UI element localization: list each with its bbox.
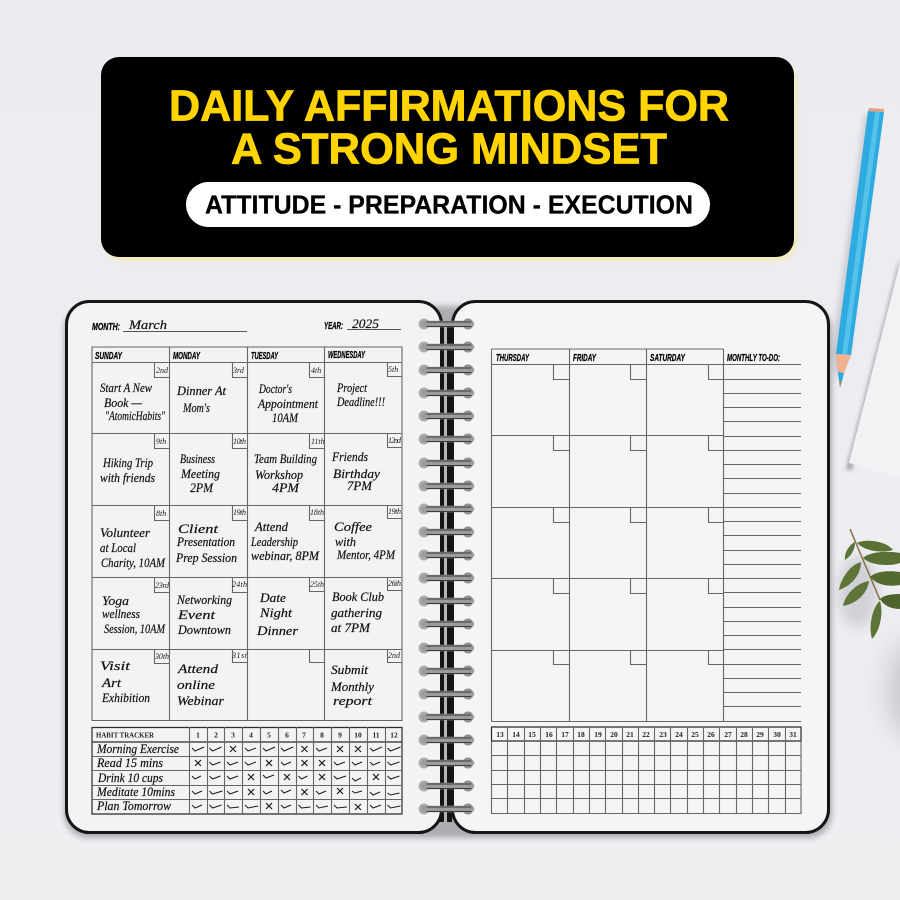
date numbers: 23rd (155, 581, 170, 590)
day numbers: 24 (675, 730, 683, 739)
date numbers: 30th (154, 652, 169, 661)
handwritten note: networking: Event (177, 608, 216, 622)
handwritten note: new book: Book — (104, 396, 143, 410)
month field: March (128, 318, 167, 332)
day numbers: 31 (789, 730, 797, 739)
handwritten note: doctor (257, 382, 318, 425)
handwritten note: art exhibition (100, 659, 150, 705)
habit names (96, 742, 179, 813)
handwritten note: art exhibition: Visit (100, 659, 131, 673)
handwritten note: date night (256, 591, 298, 638)
handwritten note: hiking: with friends (100, 471, 155, 485)
handwritten note: team building: Team Building (254, 452, 317, 466)
day numbers: 25 (691, 730, 699, 739)
habit names: Drink 10 cups (97, 771, 163, 785)
handwritten note: birthday: Birthday (333, 467, 380, 481)
plant sprig (838, 529, 900, 639)
handwritten note: client (175, 522, 237, 565)
day numbers: 16 (545, 730, 553, 739)
day numbers: 30 (773, 730, 781, 739)
handwritten note: project: Deadline!!! (336, 395, 385, 409)
day numbers: 9 (338, 730, 342, 740)
handwritten note: monthly report: Monthly (330, 680, 374, 694)
title (169, 82, 729, 174)
day numbers: 29 (756, 730, 764, 739)
left notebook page (66, 302, 442, 832)
handwritten note: webinar: Leadership (250, 535, 298, 549)
year field (324, 317, 401, 332)
date numbers: 2nd (156, 366, 169, 375)
year field: 2025 (352, 317, 379, 331)
habit names: Read 15 mins (96, 756, 163, 770)
handwritten note: networking: Downtown (177, 623, 231, 637)
right notebook page (452, 302, 828, 832)
handwritten note: birthday: 7PM (347, 479, 373, 493)
calendar grid: Thursday to Saturday (492, 349, 801, 722)
handwritten note: project (336, 381, 385, 409)
handwritten note: project: Project (336, 381, 367, 395)
weekday headers: TUESDAY (251, 351, 279, 362)
handwritten note: team building: Workshop (255, 468, 303, 482)
soft shadow, lower right (890, 642, 900, 738)
habit names: Morning Exercise (96, 742, 179, 756)
handwritten note: book club: Book Club (332, 590, 384, 604)
day numbers: 3 (231, 730, 235, 740)
habit tracker, days 1 to 12 (92, 727, 402, 814)
date numbers: 8th (156, 509, 166, 518)
handwritten note: dinner: Mom's (182, 401, 210, 415)
handwritten note: client: Client (178, 522, 219, 536)
weekday headers and to-do heading: FRIDAY (573, 353, 597, 364)
handwritten note: coffee: Mentor, 4PM (336, 548, 396, 562)
handwritten note: hiking (100, 456, 155, 485)
handwritten note: book club (331, 590, 384, 635)
handwritten note: online webinar (177, 662, 224, 708)
day numbers: 4 (249, 730, 253, 740)
handwritten note: yoga: Yoga (102, 594, 129, 608)
handwritten note: date night: Date (259, 591, 286, 605)
handwritten note: yoga: wellness (102, 607, 140, 621)
spiral binding coils (424, 322, 471, 812)
handwritten note: date night: Dinner (256, 624, 298, 638)
handwritten note: doctor: 10AM (272, 411, 298, 425)
handwritten note: monthly report: report (333, 694, 373, 708)
year field: YEAR: (324, 321, 343, 332)
title: DAILY AFFIRMATIONS FOR (169, 82, 729, 130)
day numbers: 6 (285, 730, 289, 740)
spine of the binding (438, 322, 452, 822)
check marks (192, 747, 400, 808)
day numbers: 21 (626, 730, 634, 739)
date numbers: 18th (310, 508, 324, 517)
handwritten note: doctor: Appointment (257, 397, 318, 411)
day numbers: 22 (642, 730, 650, 739)
handwritten note: yoga: Session, 10AM (104, 622, 165, 636)
handwritten note: client: Prep Session (175, 551, 237, 565)
handwritten note: new book: Start A New (100, 381, 153, 395)
day numbers: 2 (214, 730, 218, 740)
handwritten note: team building (254, 452, 317, 495)
handwritten note: online webinar: online (177, 678, 216, 692)
weekday headers and to-do heading: SATURDAY (650, 353, 686, 364)
tracker heading: HABIT TRACKER (96, 732, 155, 740)
day numbers: 1 (196, 730, 200, 740)
handwritten note: coffee (334, 520, 396, 562)
handwritten note: date night: Night (259, 606, 293, 620)
handwritten note: client: Presentation (176, 535, 235, 549)
handwritten note: dinner (176, 384, 227, 415)
month field (92, 318, 247, 333)
weekday headers (95, 350, 366, 362)
weekday headers: MONDAY (173, 351, 201, 362)
handwritten note: volunteer (100, 526, 165, 570)
handwritten note: dinner: Dinner At (176, 384, 227, 398)
handwritten note: webinar: Attend (254, 520, 289, 534)
notebook shadow (64, 306, 832, 838)
day numbers: 12 (390, 730, 398, 740)
month field: MONTH: (92, 322, 120, 333)
day numbers: 18 (577, 730, 585, 739)
weekday headers and to-do heading (496, 353, 780, 364)
handwritten note: business meeting (180, 452, 220, 495)
day numbers: 27 (724, 730, 732, 739)
day numbers: 5 (267, 730, 271, 740)
date numbers: 5th (388, 365, 398, 374)
subtitle pill: ATTITUDE - PREPARATION - EXECUTION (205, 190, 693, 220)
day numbers (196, 730, 398, 740)
handwritten note: yoga (102, 594, 165, 636)
handwritten note: book club: gathering (331, 606, 382, 620)
handwritten note: networking: Networking (176, 593, 232, 607)
handwritten note: volunteer: at Local (100, 541, 136, 555)
cross marks (195, 746, 379, 810)
habit names: Plan Tomorrow (96, 799, 172, 813)
day numbers: 11 (372, 730, 380, 740)
date numbers: 26th (388, 579, 401, 588)
faint yellow glow beneath banner (103, 62, 797, 261)
blue pencil (832, 108, 884, 388)
handwritten note: doctor: Doctor's (258, 382, 292, 396)
day numbers: 23 (659, 730, 667, 739)
date numbers: 9th (156, 437, 166, 446)
handwritten note: volunteer: Charity, 10AM (101, 556, 165, 570)
subtitle pill (186, 182, 710, 227)
handwritten note: team building: 4PM (272, 481, 300, 495)
date numbers: 24th (232, 580, 247, 589)
handwritten note: birthday: Friends (331, 450, 368, 464)
day numbers: 13 (496, 730, 504, 739)
date numbers: 19th (233, 508, 246, 517)
date numbers: 12nd (388, 436, 402, 445)
weekday headers: WEDNESDAY (328, 350, 366, 361)
handwritten note: art exhibition: Art (101, 676, 122, 690)
handwritten note: book club: at 7PM (331, 621, 371, 635)
date numbers: 2nd (388, 651, 401, 660)
handwritten note: coffee: with (335, 535, 356, 549)
handwritten note: art exhibition: Exhibition (101, 691, 150, 705)
monthly to-do lines (723, 380, 801, 706)
handwritten note: volunteer: Volunteer (100, 526, 150, 540)
date numbers: 4th (311, 366, 321, 375)
day numbers: 28 (740, 730, 748, 739)
title: A STRONG MINDSET (231, 124, 667, 174)
weekday headers: SUNDAY (95, 351, 123, 362)
day numbers: 10 (354, 730, 362, 740)
day numbers: 17 (561, 730, 569, 739)
habit tracker, days 13 to 31 (492, 727, 801, 814)
handwritten note: webinar (250, 520, 320, 563)
handwritten note: online webinar: Attend (177, 662, 219, 676)
day numbers: 14 (512, 730, 520, 739)
day numbers: 19 (594, 730, 602, 739)
day numbers: 26 (707, 730, 715, 739)
day numbers: 7 (302, 730, 306, 740)
handwritten note: new book (100, 381, 166, 423)
date numbers: 19th (388, 507, 401, 516)
day numbers: 8 (320, 730, 324, 740)
handwritten note: online webinar: Webinar (177, 694, 224, 708)
handwritten note: new book: "AtomicHabits" (105, 409, 166, 423)
date numbers: 31st (231, 651, 248, 660)
handwritten note: monthly report: Submit (331, 663, 369, 677)
day numbers: 20 (610, 730, 618, 739)
day numbers: 15 (528, 730, 536, 739)
day numbers (496, 730, 797, 739)
handwritten note: monthly report (330, 663, 374, 708)
handwritten note: webinar: webinar, 8PM (251, 549, 320, 563)
paper sheet at right edge (846, 258, 900, 478)
calendar grid: Sunday to Wednesday (92, 347, 402, 720)
handwritten note: birthday (331, 450, 380, 493)
date numbers: 11th (311, 437, 325, 446)
handwritten note: hiking: Hiking Trip (102, 456, 153, 470)
weekday headers and to-do heading: MONTHLY TO-DO: (727, 353, 780, 364)
weekday headers and to-do heading: THURSDAY (496, 353, 530, 364)
date numbers: 3rd (232, 366, 245, 375)
handwritten note: business meeting: Meeting (180, 467, 220, 481)
handwritten note: business meeting: Business (180, 452, 215, 466)
handwritten note: networking (176, 593, 232, 637)
handwritten note: business meeting: 2PM (190, 481, 214, 495)
handwritten note: coffee: Coffee (334, 520, 373, 534)
date numbers: 10th (233, 437, 246, 446)
date numbers: 25th (310, 580, 324, 589)
banner: headline panel (101, 57, 794, 257)
habit names: Meditate 10mins (96, 785, 175, 799)
date numbers (154, 365, 402, 661)
